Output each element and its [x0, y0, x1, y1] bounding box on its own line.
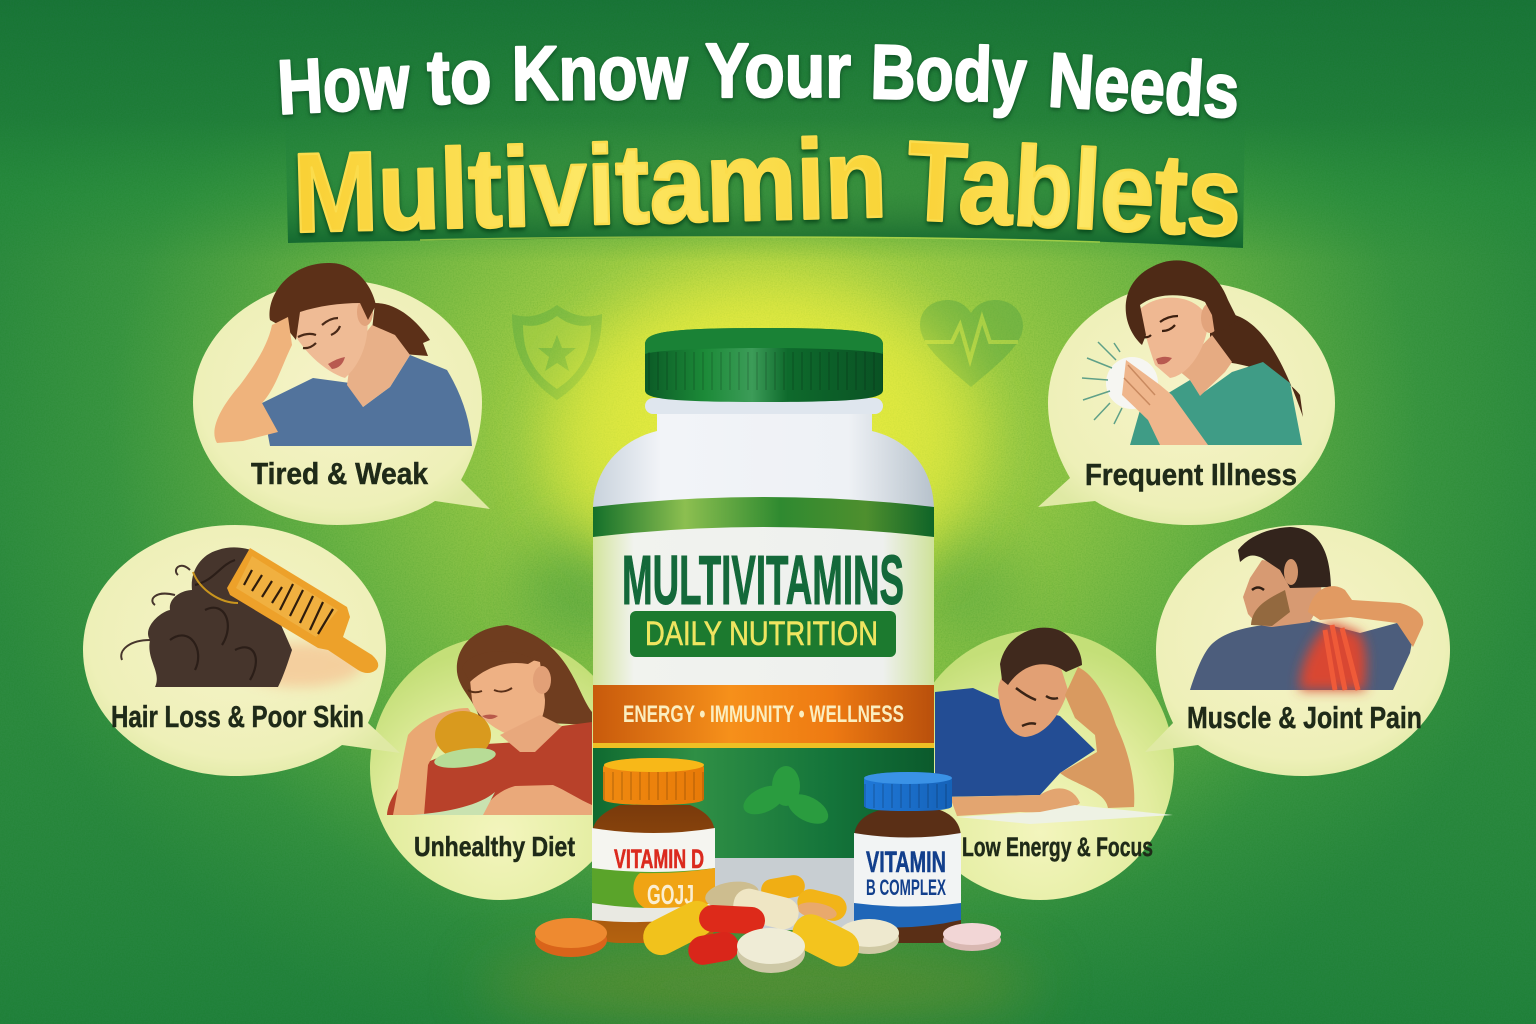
orange cap	[603, 758, 704, 805]
label: Low Energy & Focus	[962, 832, 1153, 862]
neck ring	[645, 398, 883, 414]
product name: MULTIVITAMINS	[622, 541, 904, 619]
daily nutrition badge	[630, 611, 896, 657]
icon: leaves	[739, 766, 833, 830]
panel: frequent illness	[1038, 260, 1335, 525]
bubble	[1145, 525, 1450, 776]
white round tablet	[737, 928, 805, 973]
pills pile	[535, 873, 1001, 973]
label: Muscle & Joint Pain	[1187, 700, 1422, 735]
bubble	[906, 630, 1174, 900]
panel: muscle and joint pain	[1145, 525, 1450, 776]
man with back pain	[1190, 527, 1423, 690]
bubble	[1038, 282, 1335, 525]
icon: heart with pulse	[920, 300, 1023, 387]
bubble	[83, 525, 400, 776]
orange benefit band	[593, 685, 934, 748]
top green band	[593, 497, 934, 537]
label: Tired & Weak	[251, 456, 429, 491]
vitamin B complex bottle: VITAMIN	[866, 846, 946, 879]
bubble	[370, 636, 630, 900]
daily nutrition badge: DAILY NUTRITION	[645, 615, 878, 653]
label: Frequent Illness	[1085, 457, 1297, 492]
hair and scalp	[121, 547, 362, 687]
brown glass	[854, 810, 961, 943]
title line 1: Needs	[1046, 37, 1242, 135]
icon: shield	[512, 305, 602, 400]
vitamin D bottle: VITAMIN D	[614, 844, 704, 874]
label	[592, 828, 715, 876]
tired man	[935, 628, 1173, 824]
panel: tired and weak	[193, 263, 490, 525]
vitamin B complex bottle	[854, 772, 961, 943]
red capsule top	[698, 904, 766, 935]
label	[854, 833, 961, 908]
yellow capsule left	[637, 895, 721, 961]
title line 2: Tablets	[904, 117, 1245, 260]
title line 1: to	[426, 33, 492, 121]
title line 1: Your	[705, 28, 851, 114]
orange benefit band: ENERGY • IMMUNITY • WELLNESS	[623, 701, 904, 728]
panel: unhealthy diet	[370, 625, 630, 900]
amber glass	[592, 805, 715, 943]
yellow orange tablet	[795, 886, 849, 924]
title line 1	[275, 28, 1242, 135]
peach tablet	[796, 900, 838, 922]
yellow orange capsule	[759, 873, 807, 903]
vitamin B complex bottle: B COMPLEX	[866, 875, 946, 900]
panel: low energy and focus	[906, 628, 1174, 900]
label background	[593, 522, 934, 690]
bottle cap	[645, 328, 883, 402]
bubble	[193, 280, 490, 525]
lower grey panel	[593, 858, 934, 930]
illness woman	[1082, 260, 1303, 445]
vitamin D bottle	[592, 758, 715, 943]
woman eating	[387, 625, 592, 815]
panel: hair loss and poor skin	[83, 525, 400, 776]
blue cap	[864, 772, 952, 811]
orange tablet	[535, 918, 607, 957]
vitamin D bottle: GOJJ	[647, 879, 694, 910]
label: Hair Loss & Poor Skin	[111, 699, 364, 734]
title line 2: Multivitamin	[291, 114, 888, 256]
title line 1: Know	[511, 29, 689, 117]
icon: comb	[227, 548, 378, 673]
title line 2	[291, 114, 1245, 260]
red capsule bottom	[686, 930, 741, 967]
yellow tablet right	[786, 908, 865, 973]
cream capsule	[730, 885, 802, 933]
title line 1: How	[275, 38, 413, 131]
beige capsule	[703, 878, 761, 912]
lower green band	[593, 748, 934, 858]
title banner	[285, 110, 1245, 248]
main bottle	[549, 280, 979, 930]
title line 1: Body	[870, 29, 1028, 119]
title	[275, 28, 1245, 260]
pink tablet	[943, 923, 1001, 951]
tired woman	[214, 263, 472, 446]
bottle body	[593, 412, 934, 930]
label: Unhealthy Diet	[414, 831, 575, 862]
cream tablet right	[839, 919, 899, 954]
